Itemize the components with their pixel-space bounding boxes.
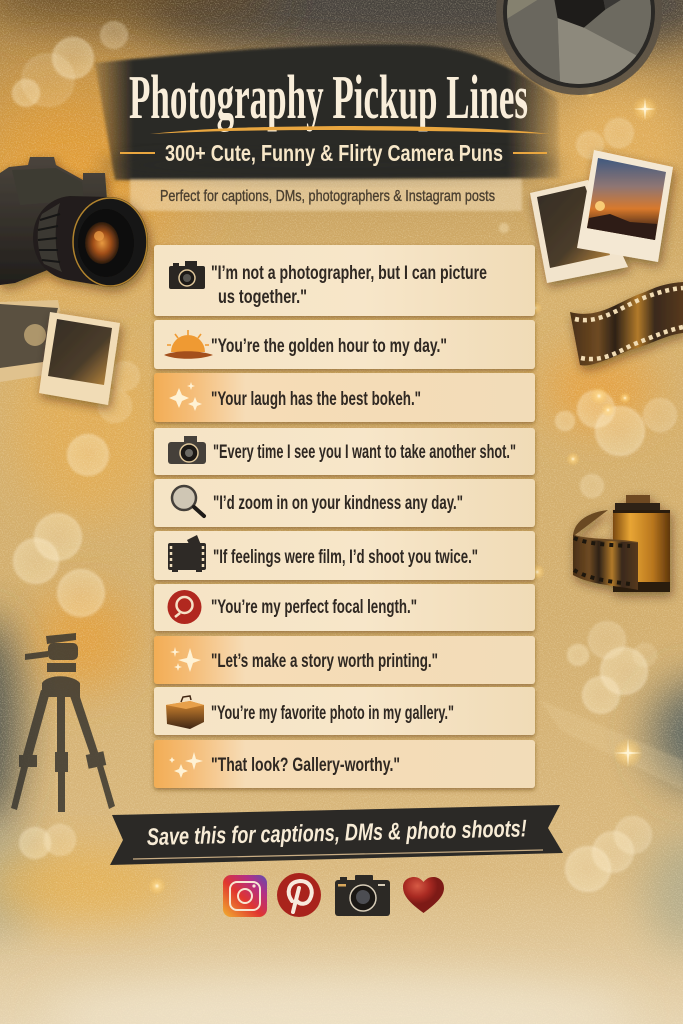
aperture lens bbox=[496, 0, 662, 95]
quote card 1: "I’m not a photographer, but I can picture bbox=[211, 263, 487, 284]
quote card 9 bbox=[154, 687, 535, 735]
quote card 4 bbox=[154, 428, 535, 475]
quote card 2: "You’re the golden hour to my day." bbox=[211, 336, 447, 357]
quote card 3 bbox=[154, 373, 535, 422]
tripod bbox=[11, 633, 115, 812]
title banner bbox=[95, 44, 560, 180]
quote card 6: "If feelings were film, I’d shoot you twice." bbox=[213, 547, 478, 568]
quote card 1: us together." bbox=[218, 287, 307, 308]
icon: gallery box bbox=[166, 696, 204, 729]
tagline strip: Perfect for captions, DMs, photographers & Instagram posts bbox=[160, 188, 495, 205]
social icons bbox=[223, 873, 444, 917]
icon: heart bbox=[403, 877, 444, 913]
film strip bbox=[570, 282, 683, 366]
subtitle: 300+ Cute, Funny & Flirty Camera Puns bbox=[165, 140, 503, 166]
quote card 10: "That look? Gallery-worthy." bbox=[211, 755, 400, 776]
icon: focus pin bbox=[168, 590, 202, 624]
quote card 7 bbox=[154, 584, 535, 631]
title underline swoosh bbox=[150, 126, 550, 134]
icon: sparkles bbox=[169, 382, 202, 411]
icon: instagram bbox=[223, 875, 267, 917]
quote card 9: "You’re my favorite photo in my gallery." bbox=[211, 703, 454, 724]
quote card 4: "Every time I see you I want to take another shot." bbox=[213, 442, 516, 463]
ribbon banner: Save this for captions, DMs & photo shoots! bbox=[147, 815, 527, 851]
sparkle stars bbox=[148, 86, 658, 895]
quote card 1 bbox=[154, 245, 535, 316]
tagline strip bbox=[130, 179, 522, 211]
film canister bbox=[573, 495, 670, 592]
quote card 3: "Your laugh has the best bokeh." bbox=[211, 389, 421, 410]
quote card 5 bbox=[154, 479, 535, 527]
icon: sparkles bbox=[170, 647, 201, 672]
camera illustration bbox=[0, 157, 148, 287]
quote card 2 bbox=[154, 320, 535, 369]
quote card 10 bbox=[154, 740, 535, 788]
icon: camera bbox=[335, 875, 390, 916]
icon: camera bbox=[168, 436, 206, 464]
quote card 6 bbox=[154, 531, 535, 580]
quote card 8 bbox=[154, 636, 535, 684]
quote card 8: "Let’s make a story worth printing." bbox=[211, 651, 438, 672]
quote card 5: "I’d zoom in on your kindness any day." bbox=[213, 493, 463, 514]
quote card 7: "You’re my perfect focal length." bbox=[211, 597, 417, 618]
icon: sparkles bbox=[169, 752, 203, 778]
ribbon banner bbox=[110, 805, 563, 865]
icon: film and clapper bbox=[168, 535, 206, 572]
icon: camera bbox=[169, 261, 205, 289]
icon: pinterest bbox=[277, 873, 321, 917]
icon: magnifying glass bbox=[172, 486, 204, 516]
polaroids left bbox=[0, 300, 120, 405]
polaroids top right bbox=[530, 150, 673, 283]
icon: sunset bbox=[164, 330, 213, 359]
